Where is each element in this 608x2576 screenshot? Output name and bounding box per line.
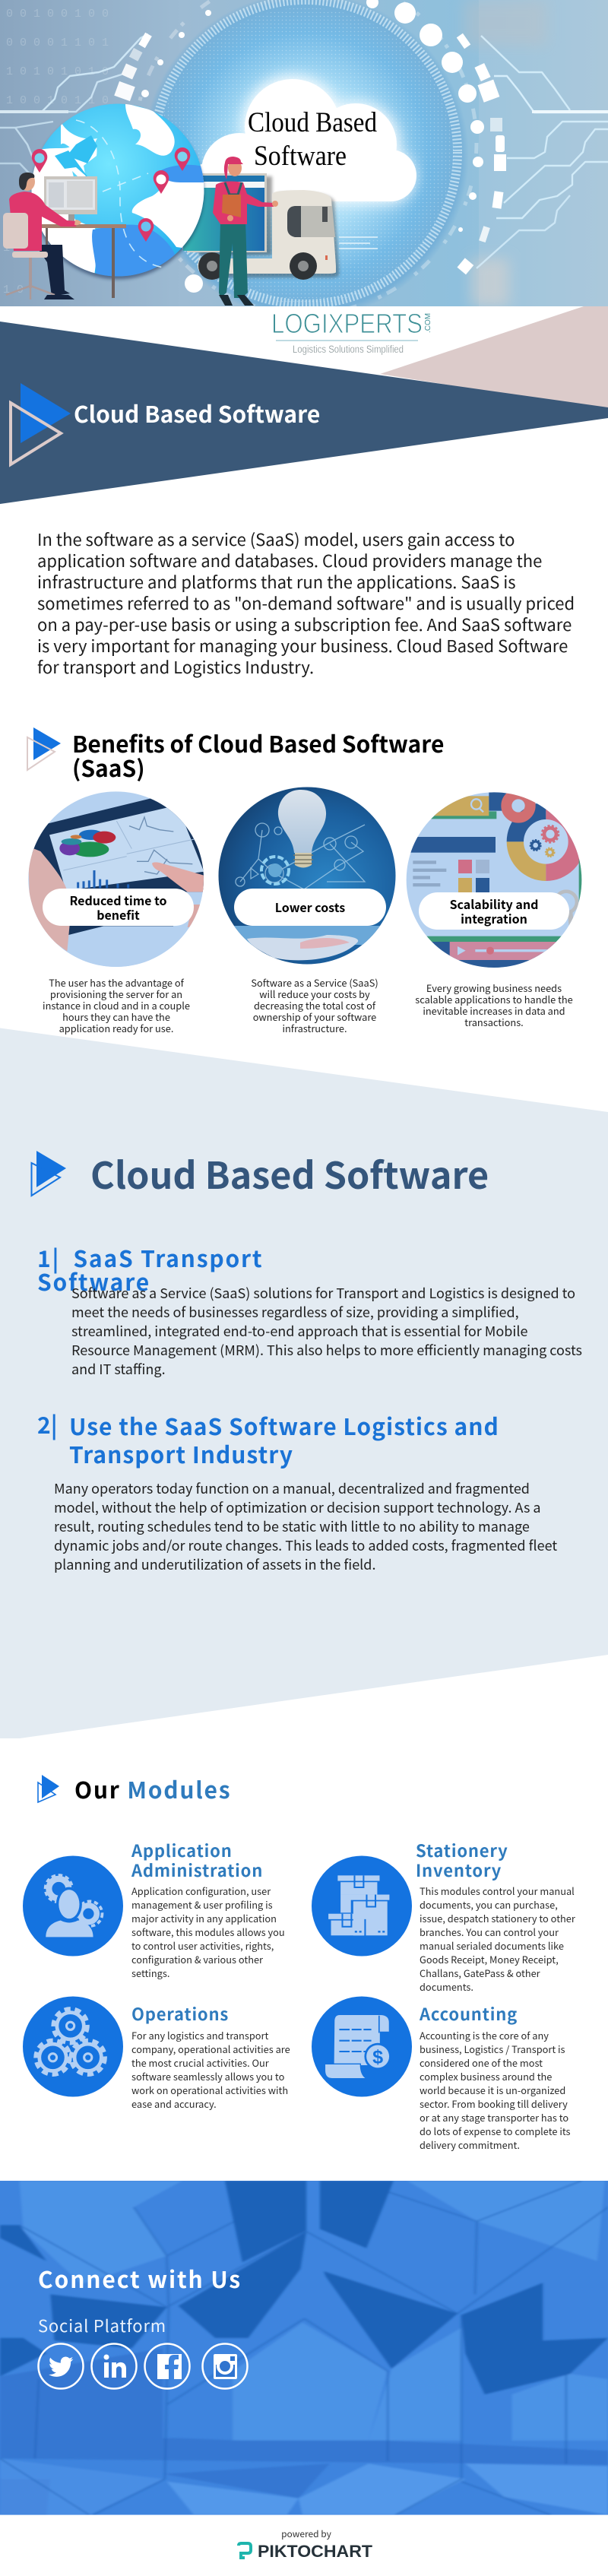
hero image: cloud based software illustration: 0 0 1 0 0 1 0 0 (6, 8, 109, 21)
modules icon (37, 1775, 59, 1803)
module title: stationery inventory: Stationery (416, 1838, 508, 1862)
piktochart logo: PIKTOCHART (258, 2542, 373, 2561)
map pins (32, 147, 190, 242)
icon: linkedin (103, 2355, 126, 2378)
module text: operations: work on operational activities with (131, 2083, 288, 2096)
benefit label: scalability (419, 892, 569, 930)
module text: operations: For any logistics and transport (131, 2028, 268, 2042)
module title: operations: Operations (131, 2001, 229, 2026)
module icon: accounting (312, 1996, 412, 2096)
paragraph 1: meet the needs of businesses regardless of size, providing a simplified, (71, 1301, 519, 1321)
subheading 1 (37, 1240, 263, 1297)
benefit label: lower costs (234, 889, 386, 926)
banner icon: play triangles (9, 383, 71, 467)
module text: accounting: business, Logistics / Transport is (420, 2042, 565, 2055)
globe (30, 103, 207, 281)
module title: stationery inventory (416, 1838, 508, 1882)
module icon: application administration (23, 1856, 123, 1957)
caption: lower costs (251, 974, 378, 1035)
paragraph 2: planning and underutilization of assets in the field. (54, 1554, 375, 1573)
module icon: operations (23, 1996, 123, 2096)
benefit label: reduced time (43, 889, 194, 926)
module text: accounting: sector. From booking till delivery (420, 2096, 568, 2110)
paragraph 1: streamlined, integrated end-to-end approach that is essential for Mobile (71, 1321, 527, 1341)
hero image: cloud based software illustration: 1 0 (3, 242, 24, 255)
intro paragraph: sometimes referred to as "on-demand software" and is usually priced (37, 591, 575, 615)
module text: application administration (131, 1884, 285, 1979)
module text: stationery inventory: manual serialed documents like (420, 1938, 564, 1952)
paragraph 2: Many operators today function on a manual, decentralized and fragmented (54, 1478, 530, 1497)
benefit label: scalability: Scalability and (450, 894, 538, 912)
subheading 2 (69, 1408, 499, 1470)
image: tablet with charts (28, 791, 204, 967)
module text: application administration: to control user activities, rights, (131, 1938, 274, 1952)
hero image: cloud based software illustration: 1 0 (3, 284, 24, 296)
module text: operations: software seamlessly allows you to (131, 2069, 284, 2083)
caption: lower costs: decreasing the total cost of (254, 997, 375, 1012)
caption: scalability: Every growing business needs (426, 981, 562, 995)
caption: scalability: inevitable increases in data and (423, 1003, 565, 1018)
man at desk (3, 173, 126, 299)
hero image: cloud based software illustration: 1 0 1 0 1 0 1 0 (6, 65, 109, 78)
module text: accounting (420, 2028, 571, 2151)
delivery worker (213, 157, 278, 306)
image: interface dashboard (406, 792, 582, 968)
intro paragraph: application software and databases. Cloud providers manage the (37, 548, 542, 572)
module icon: stationery inventory (312, 1856, 412, 1957)
module text: stationery inventory: issue, despatch stationery to other (420, 1911, 575, 1925)
module text: operations: the most crucial activities. Our (131, 2055, 269, 2069)
module text: application administration: management & user profiling is (131, 1897, 273, 1911)
benefits heading (72, 726, 444, 784)
intro paragraph (37, 527, 575, 679)
module text: accounting: considered one of the most (420, 2055, 543, 2069)
benefit label: reduced time: Reduced time to (69, 891, 167, 909)
module text: accounting: do lots of expense to complete its (420, 2124, 571, 2137)
module text: stationery inventory: documents, you can purchase, (420, 1897, 558, 1911)
module text: stationery inventory: This modules control your manual (420, 1884, 575, 1897)
modules heading: Our Modules (74, 1772, 231, 1805)
module text: stationery inventory: Goods Receipt, Money Receipt, (420, 1952, 559, 1966)
paragraph 2 (54, 1478, 557, 1573)
subheading 2: Use the SaaS Software Logistics and (69, 1408, 499, 1441)
subheading 2 number: 2| (37, 1407, 58, 1440)
module text: operations: company, operational activities are (131, 2042, 290, 2055)
light panel background (0, 1028, 608, 1738)
module text: application administration: software, this modules allows you (131, 1925, 285, 1938)
icon: facebook (157, 2354, 182, 2379)
section heading: Cloud Based Software (90, 1146, 489, 1199)
module title: application administration (131, 1838, 263, 1882)
subheading 2: Transport Industry (69, 1437, 293, 1470)
module text: accounting: complex business around the (420, 2069, 552, 2083)
caption: reduced time (43, 974, 190, 1035)
caption: reduced time: instance in cloud and in a couple (43, 997, 190, 1012)
banner title: Cloud Based Software (74, 396, 320, 429)
benefits heading: Benefits of Cloud Based Software (72, 726, 444, 759)
benefits icon (27, 727, 61, 772)
caption: reduced time: provisioning the server for an (50, 987, 182, 1000)
module text: stationery inventory: documents. (420, 1979, 473, 1993)
cloud label (248, 107, 377, 172)
logo wordmark: Logistics Solutions Simplified (293, 344, 404, 355)
hero image: cloud based software illustration: 1 0 0 1 0 1 1 0 (6, 94, 109, 107)
ring of data dashes (135, 0, 477, 314)
caption: reduced time: hours they can have the (62, 1009, 170, 1023)
intro paragraph: infrastructure and platforms that run the applications. SaaS is (37, 569, 516, 594)
caption: scalability (415, 981, 573, 1029)
footer background: glass facets (0, 2181, 608, 2515)
social icons (37, 2343, 249, 2390)
caption: lower costs: ownership of your software (253, 1009, 376, 1023)
module text: accounting: or at any stage transporter has to (420, 2110, 568, 2124)
caption: scalability: transactions. (464, 1015, 524, 1029)
caption: lower costs: infrastructure. (282, 1020, 347, 1035)
background shapes: pink wedge and navy banner (0, 306, 608, 504)
caption: lower costs: Software as a Service (SaaS) (251, 974, 378, 990)
module title: application administration: Administration (131, 1858, 263, 1882)
benefit label: scalability: integration (461, 909, 527, 927)
module text: accounting: Accounting is the core of any (420, 2028, 549, 2042)
logo wordmark: .COM (424, 313, 432, 333)
module text: operations (131, 2028, 290, 2110)
icon: instagram (214, 2354, 237, 2379)
hero image: cloud based software illustration: 0 0 0 0 1 1 0 1 (6, 36, 109, 49)
intro paragraph: on a pay-per-use basis or using a subscription fee. And SaaS software (37, 612, 572, 636)
module text: stationery inventory: branches. You can control your (420, 1925, 559, 1938)
cloud (188, 75, 416, 209)
module text: application administration: Application configuration, user (131, 1884, 271, 1897)
powered by: powered by (281, 2527, 331, 2540)
paragraph 2: dynamic jobs and/or route changes. This leads to added costs, fragmented fleet (54, 1535, 557, 1555)
caption: reduced time: The user has the advantage of (49, 974, 184, 990)
module title: accounting: Accounting (420, 2001, 518, 2026)
paragraph 2: result, routing schedules tend to be static with little to no ability to manage (54, 1516, 530, 1535)
logo (271, 308, 432, 355)
module text: operations: ease and accuracy. (131, 2096, 217, 2110)
benefits heading: (SaaS) (72, 750, 145, 784)
logo wordmark (271, 308, 432, 355)
module text: application administration: configuration & various other (131, 1952, 263, 1966)
hero image: cloud based software illustration (0, 0, 608, 306)
module text: accounting: delivery commitment. (420, 2137, 520, 2151)
paragraph 1 (71, 1283, 582, 1379)
paragraph 1: Resource Management (MRM). This also helps to more efficiently managing costs (71, 1339, 582, 1359)
module title: stationery inventory: Inventory (416, 1858, 502, 1882)
paragraph 2: model, without the help of optimization or decision support technology. As a (54, 1497, 541, 1517)
icon: twitter (49, 2357, 73, 2377)
subheading 1: Software (37, 1263, 150, 1297)
social platform label: Social Platform (38, 2313, 166, 2337)
module text: application administration: major activity in any application (131, 1911, 277, 1925)
section icon (30, 1151, 66, 1197)
benefit label: lower costs: Lower costs (275, 898, 345, 916)
intro paragraph: for transport and Logistics Industry. (37, 654, 314, 679)
module text: stationery inventory (420, 1884, 575, 1993)
intro paragraph: In the software as a service (SaaS) model, users gain access to (37, 527, 515, 551)
intro paragraph: is very important for managing your business. Cloud Based Software (37, 633, 568, 657)
module text: application administration: settings. (131, 1966, 169, 1979)
module icon: accounting: $ (372, 2046, 383, 2067)
caption: reduced time: application ready for use. (59, 1020, 173, 1035)
paragraph 1: and IT staffing. (71, 1359, 166, 1379)
cloud label: Software (254, 141, 347, 172)
module text: accounting: world because it is un-organized (420, 2083, 565, 2096)
caption: scalability: scalable applications to handle the (415, 992, 573, 1006)
caption: lower costs: will reduce your costs by (259, 987, 370, 1000)
truck (183, 173, 339, 280)
benefit label: reduced time: benefit (97, 905, 140, 923)
module text: stationery inventory: Challans, GatePass & other (420, 1966, 540, 1979)
image: lightbulb and network (219, 787, 395, 964)
subheading 1: 1| SaaS Transport (37, 1240, 263, 1274)
connect heading: Connect with Us (38, 2261, 242, 2295)
paragraph 1: Software as a Service (SaaS) solutions for Transport and Logistics is designed to (71, 1283, 575, 1303)
module title: application administration: Application (131, 1838, 233, 1862)
cloud label: Cloud Based (248, 107, 377, 138)
benefit images (28, 787, 582, 968)
